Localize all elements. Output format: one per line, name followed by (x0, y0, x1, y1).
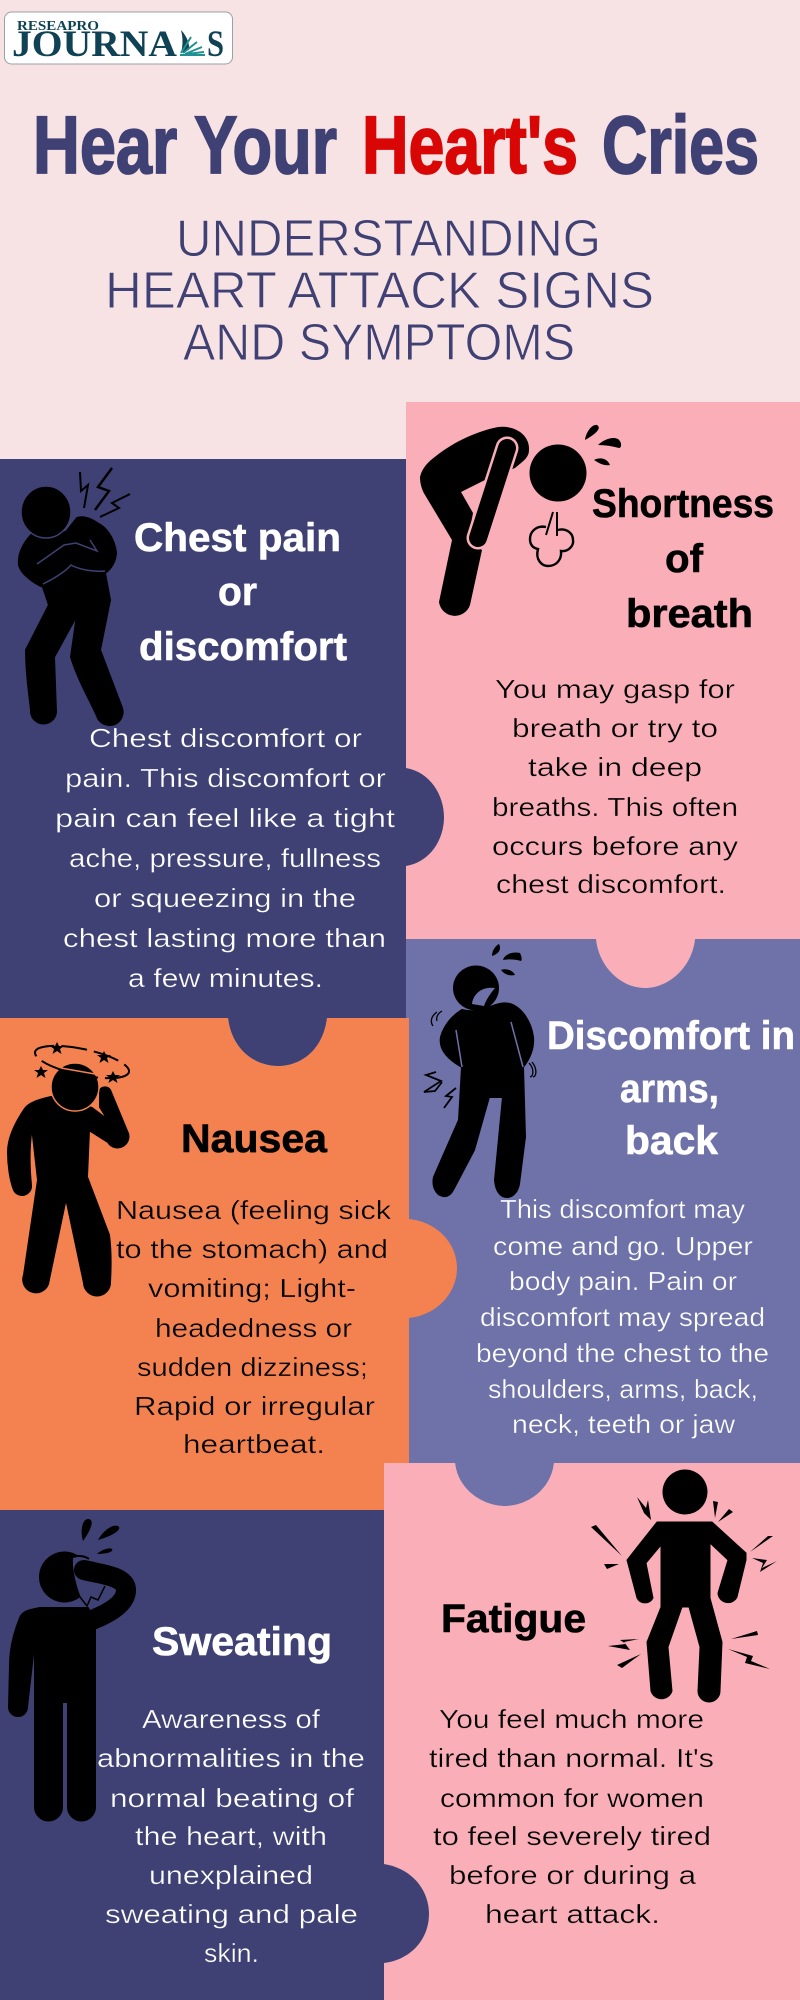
heading: discomfort in arms, back: Discomfort in (547, 1014, 795, 1058)
heading: discomfort in arms, back: back (625, 1119, 719, 1163)
text: arms and back description: come and go. Upper (493, 1231, 753, 1261)
heading: discomfort in arms, back: arms, (620, 1067, 719, 1111)
logo: Reseapro Journals: RESEAPRO (17, 19, 99, 34)
text: nausea description: sudden dizziness; (137, 1352, 368, 1382)
subtitle: UNDERSTANDING (176, 210, 601, 268)
text: nausea description: headedness or (155, 1313, 352, 1343)
text: sweating description (97, 1704, 365, 1968)
panel: chest pain background (0, 459, 444, 1066)
text: nausea description: Nausea (feeling sick (116, 1195, 392, 1225)
title: Hear Your (33, 100, 337, 191)
text: nausea description: vomiting; Light- (148, 1273, 356, 1303)
text: sweating description: skin. (204, 1938, 259, 1968)
text: shortness of breath description (492, 674, 738, 899)
text: sweating description: the heart, with (135, 1821, 327, 1851)
text: fatigue description: common for women (440, 1783, 704, 1813)
text: fatigue description: before or during a (449, 1860, 697, 1890)
text: sweating description: abnormalities in the (97, 1743, 365, 1773)
subtitle: AND SYMPTOMS (183, 314, 575, 372)
icon: person clutching chest (19, 468, 130, 725)
text: nausea description: heartbeat. (183, 1429, 325, 1459)
text: chest pain description: ache, pressure, fullness (69, 843, 381, 873)
text: arms and back description: body pain. Pain or (509, 1266, 737, 1296)
text: fatigue description: heart attack. (485, 1899, 660, 1929)
heading: chest pain: or (218, 570, 257, 614)
heading: nausea: Nausea (181, 1117, 328, 1161)
text: chest pain description: pain. This discomfort or (65, 763, 386, 793)
icon: dizzy person with stars (8, 1039, 132, 1296)
heading: chest pain: Chest pain (134, 516, 341, 560)
icon: sweating person wiping forehead (9, 1519, 126, 1820)
text: shortness of breath description: You may gasp for (495, 674, 735, 704)
heading: chest pain (134, 516, 347, 669)
panel: fatigue background (384, 1463, 800, 2000)
text: fatigue description (429, 1704, 714, 1929)
heading: shortness of breath: breath (626, 592, 753, 636)
text: arms and back description: shoulders, arms, back, (488, 1374, 758, 1404)
heading: discomfort in arms, back (547, 1014, 795, 1163)
text: chest pain description: chest lasting more than (63, 923, 386, 953)
subtitle (105, 210, 654, 372)
title: Heart's (362, 100, 578, 191)
text: fatigue description: tired than normal. It's (429, 1743, 714, 1773)
panel: discomfort in arms and back background (406, 939, 800, 1506)
text: chest pain description: Chest discomfort or (89, 723, 362, 753)
icon: person with arm and back pain (424, 944, 536, 1197)
text: chest pain description: a few minutes. (128, 963, 323, 993)
text: arms and back description (476, 1194, 769, 1439)
icon: person bent over gasping (420, 425, 621, 616)
heading: shortness of breath (592, 482, 774, 636)
text: sweating description: unexplained (149, 1860, 313, 1890)
text: shortness of breath description: breaths. This often (492, 792, 738, 822)
logo: Reseapro Journals: JOURNA (12, 24, 177, 65)
text: sweating description: normal beating of (110, 1783, 355, 1813)
logo: Reseapro Journals: S (207, 24, 224, 65)
subtitle: HEART ATTACK SIGNS (105, 262, 654, 320)
text: shortness of breath description: occurs before any (492, 831, 738, 861)
heading: shortness of breath: Shortness (592, 482, 774, 526)
text: nausea description: to the stomach) and (116, 1234, 388, 1264)
text: fatigue description: You feel much more (439, 1704, 704, 1734)
heading: chest pain: discomfort (139, 625, 347, 669)
panel: nausea background (0, 1018, 457, 1510)
text: nausea description (116, 1195, 392, 1459)
text: arms and back description: neck, teeth or jaw (512, 1409, 735, 1439)
heading: fatigue: Fatigue (441, 1597, 586, 1641)
text: fatigue description: to feel severely tired (433, 1821, 711, 1851)
text: nausea description: Rapid or irregular (134, 1391, 375, 1421)
heading: shortness of breath: of (665, 537, 704, 581)
text: chest pain description (55, 723, 396, 993)
icon: tired person with pain marks (591, 1470, 777, 1702)
text: chest pain description: pain can feel like a tight (55, 803, 396, 833)
panel: shortness of breath background (406, 402, 800, 988)
text: chest pain description: or squeezing in the (94, 883, 356, 913)
text: arms and back description: beyond the chest to the (476, 1338, 769, 1368)
title (33, 100, 759, 191)
logo: Reseapro Journals (4, 12, 232, 65)
text: shortness of breath description: breath or try to (512, 713, 718, 743)
text: arms and back description: discomfort may spread (480, 1302, 765, 1332)
text: shortness of breath description: take in deep (528, 752, 702, 782)
text: sweating description: sweating and pale (105, 1899, 358, 1929)
text: shortness of breath description: chest discomfort. (496, 869, 726, 899)
text: arms and back description: This discomfort may (500, 1194, 745, 1224)
text: sweating description: Awareness of (142, 1704, 321, 1734)
heading: sweating: Sweating (152, 1620, 332, 1664)
panel: sweating background (0, 1510, 429, 2000)
